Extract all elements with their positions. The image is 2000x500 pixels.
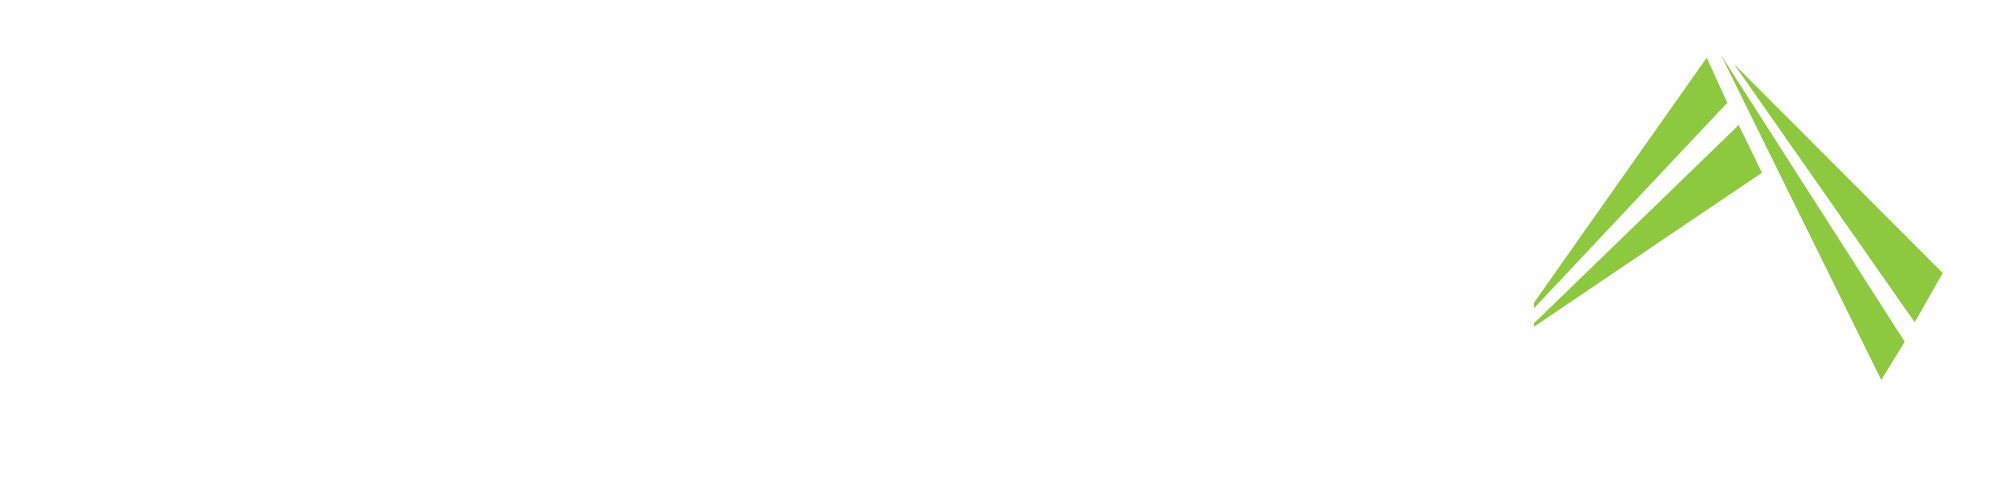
blade: lower left <box>1534 125 1762 327</box>
blade: centre right <box>1721 55 1905 380</box>
blade: far right <box>1734 64 1943 322</box>
icon: stylised A made of four blades <box>1534 55 1943 380</box>
blade: upper left <box>1534 58 1727 308</box>
